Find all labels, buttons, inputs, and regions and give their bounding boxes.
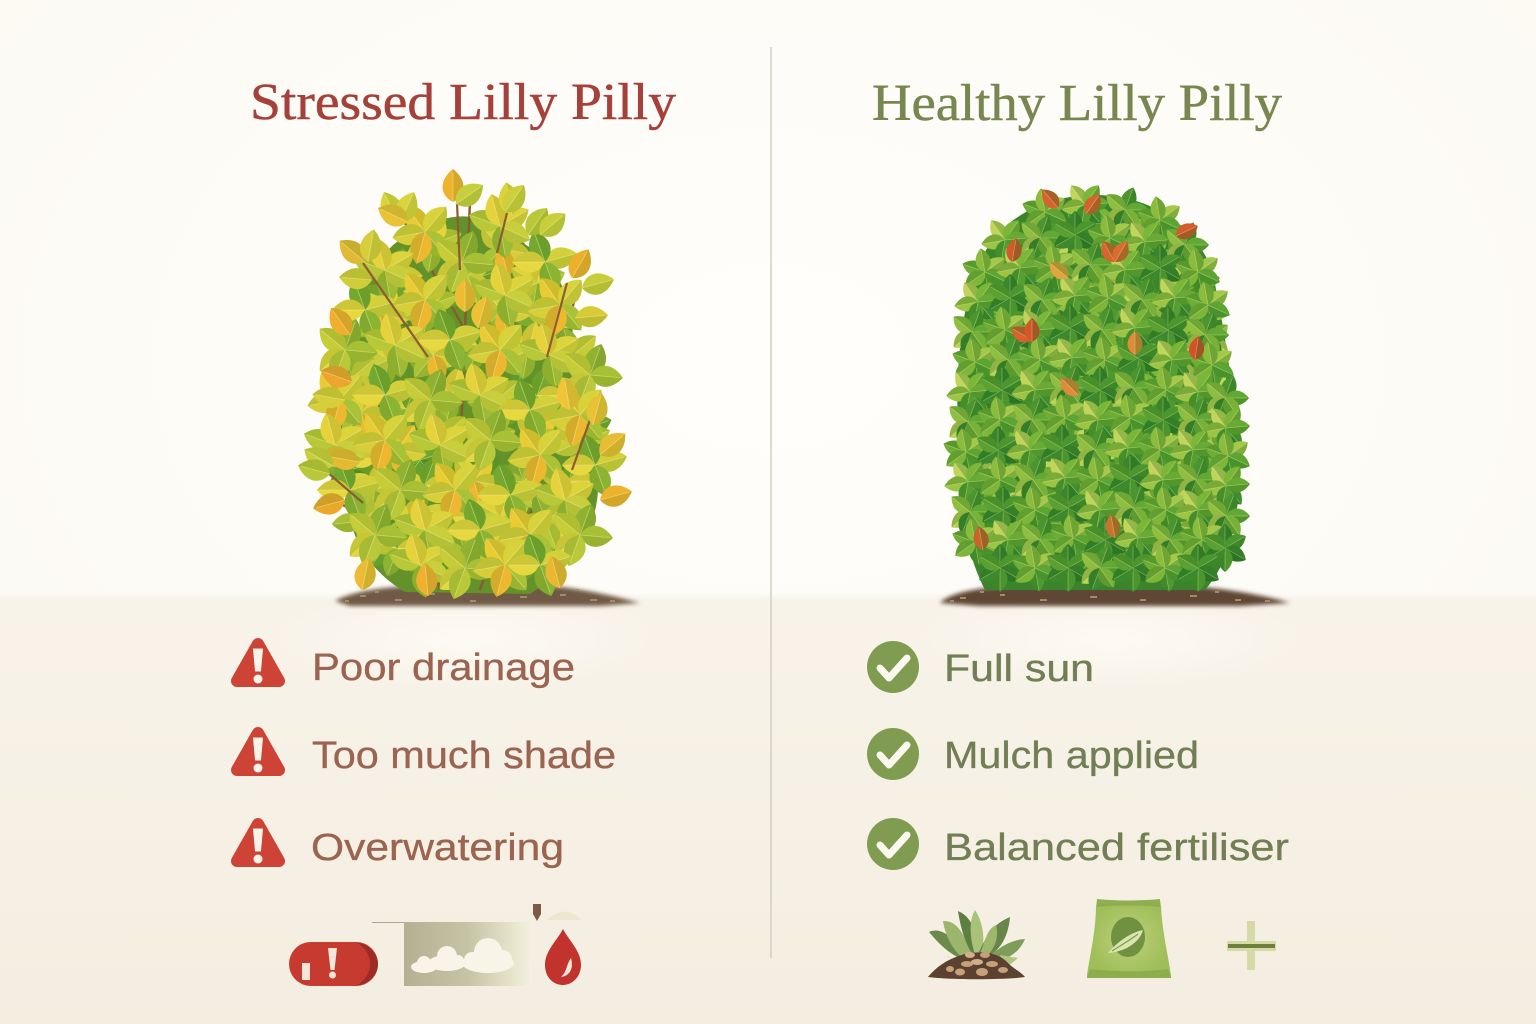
item: overwatering: Overwatering	[311, 827, 564, 869]
red new growth, healthy	[971, 185, 1206, 551]
soil mound, stressed	[335, 585, 640, 606]
icon: brown mark above drop	[533, 904, 581, 921]
back foliage layer, healthy	[958, 203, 1239, 574]
item: balanced fertiliser	[867, 818, 1289, 870]
illustration: stressed bush	[295, 169, 640, 606]
foliage clusters, stressed	[300, 191, 630, 603]
visible upper branches	[327, 203, 590, 503]
dark foliage mass, healthy	[957, 195, 1238, 590]
back foliage layer, stressed	[317, 212, 613, 582]
item: overwatering	[237, 824, 564, 869]
item: poor drainage	[237, 644, 575, 689]
centre divider	[770, 47, 772, 958]
dark foliage mass	[340, 216, 601, 594]
item: full sun: Full sun	[944, 648, 1094, 690]
illustration: healthy bush	[940, 181, 1290, 606]
deep shade clusters	[315, 247, 615, 588]
icon: clouds panel	[372, 922, 532, 986]
item: too much shade: Too much shade	[312, 735, 616, 777]
item: poor drainage: Poor drainage	[312, 647, 575, 689]
icon: water drop	[545, 929, 581, 985]
icon: mulch with plant	[928, 910, 1025, 979]
list: stressed causes	[237, 644, 616, 869]
item: balanced fertiliser: Balanced fertiliser	[944, 827, 1289, 869]
list: healthy conditions	[867, 641, 1289, 870]
branches	[330, 195, 600, 590]
icon: fertiliser bag	[1087, 899, 1171, 978]
item: full sun	[867, 641, 1094, 693]
icon: plus sign	[1227, 921, 1276, 970]
item: mulch applied	[867, 728, 1199, 780]
foliage clusters, healthy	[941, 181, 1253, 593]
icon: red warning pill	[289, 942, 378, 986]
title: healthy: Healthy Lilly Pilly	[872, 75, 1282, 132]
outer sprigs and orange leaves, stressed	[295, 169, 635, 597]
soil mound, healthy	[940, 586, 1290, 606]
item: mulch applied: Mulch applied	[944, 735, 1199, 777]
title: stressed: Stressed Lilly Pilly	[250, 74, 676, 131]
